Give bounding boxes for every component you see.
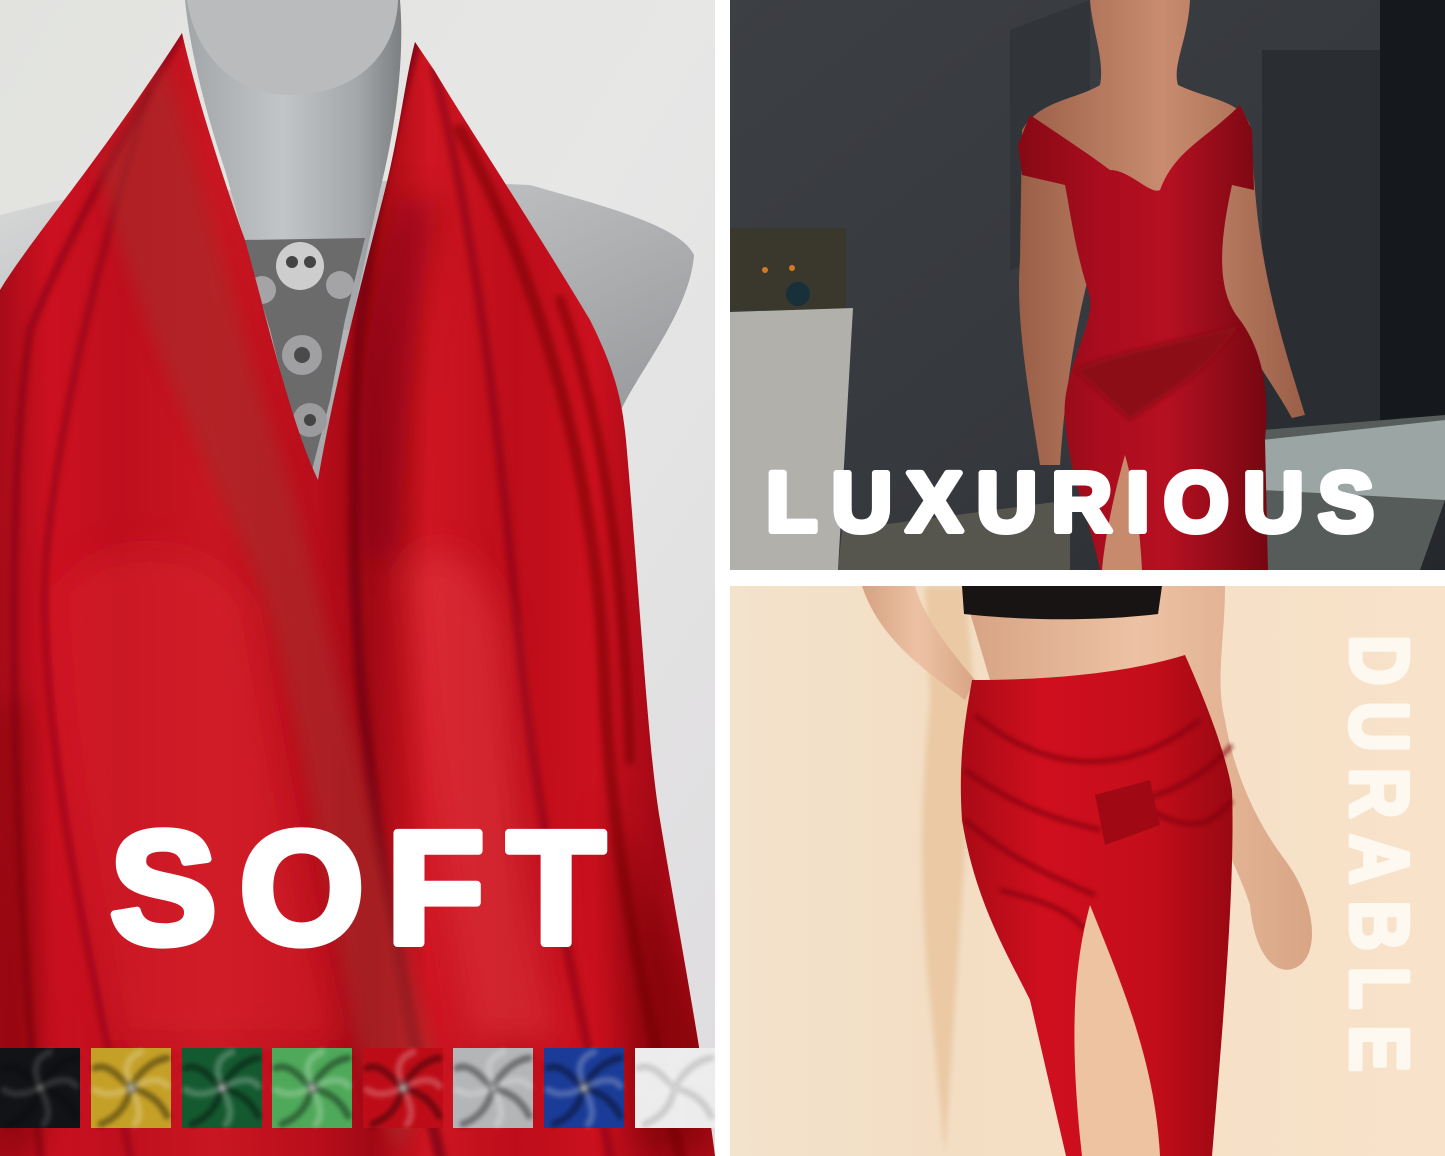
floor [838,500,1070,570]
swatch: dark green [182,1048,262,1128]
swatch: royal blue [544,1048,624,1128]
model face and skin [1019,0,1305,465]
velvet pile band [100,60,435,1156]
necklace [243,238,365,470]
leg in slit [1074,905,1160,1156]
fabric folds [14,33,680,1156]
panel: soft red velvet on mannequin [0,0,715,1156]
swatch: red [363,1048,443,1128]
swatch: white [635,1048,715,1128]
velvet sheen [0,200,715,1156]
skirt ruching [965,715,1232,930]
mannequin shoulders [0,180,694,500]
colour swatches [0,1048,715,1128]
lace top [962,586,1162,619]
heading: SOFT: SOFT [110,798,605,977]
panel: durable red skirt [730,586,1445,1156]
swatch: gold [91,1048,171,1128]
heading: LUXURIOUS: LUXURIOUS [766,455,1374,549]
concrete planter [730,308,853,570]
skirt [961,655,1233,1156]
red fabric drape [0,0,715,1156]
swatch: silver [453,1048,533,1128]
aquarium [730,228,846,310]
model torso and arms [862,586,975,700]
panel: luxurious red dress [730,0,1445,570]
dress [1018,105,1268,570]
heading: DURABLE: DURABLE [1333,635,1424,1072]
mannequin neck [185,0,401,330]
leg slit [1102,455,1142,570]
swatch: light green [272,1048,352,1128]
swatch: black [0,1048,80,1128]
